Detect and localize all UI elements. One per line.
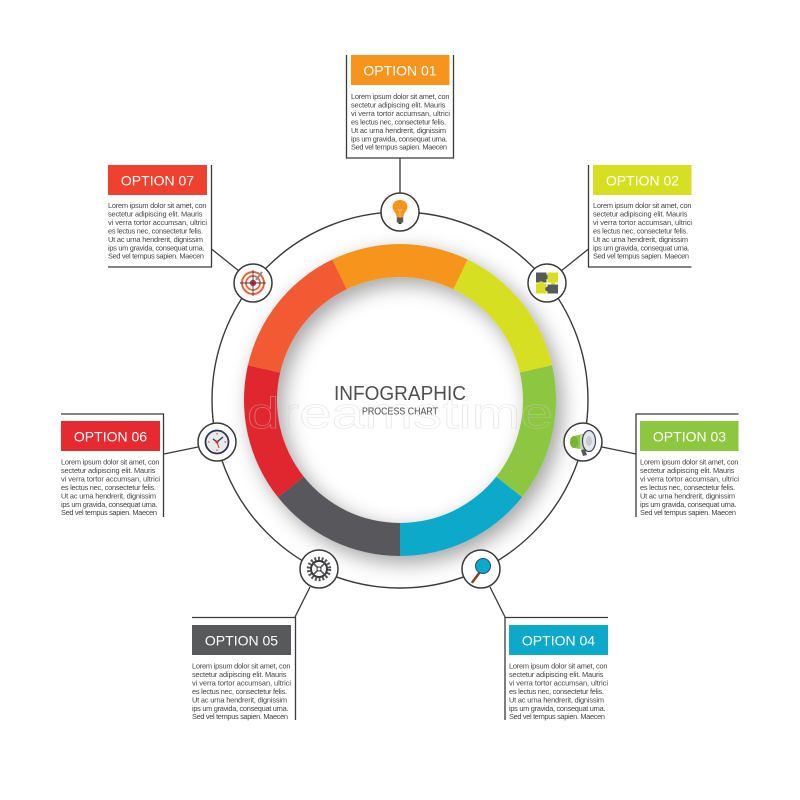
label [640,421,738,451]
segment: option 04 cyan [400,477,522,556]
text block: vi verra tortor accumsan, ultrici [509,678,608,687]
text block [593,201,692,261]
text block: ips um gravida, consequat urna. [593,243,690,252]
watermark: dreamstime [247,389,553,438]
icon: megaphone [564,423,602,461]
text block: Ut ac urna hendrerit, dignissim [61,491,156,500]
icon: gear [300,550,338,588]
text block: Sed vel tempus sapien. Maecen [593,252,689,261]
text block: Ut ac urna hendrerit, dignissim [351,126,446,135]
frame [505,618,608,720]
icon: light bulb [381,193,419,231]
label [192,625,291,655]
text block: ips um gravida, consequat urna. [61,500,158,509]
text block: es lectus nec, consectetur felis. [192,687,287,696]
connector [295,587,310,617]
text block: Ut ac urna hendrerit, dignissim [108,235,203,244]
heading: OPTION 04 [522,632,595,648]
text block: Sed vel tempus sapien. Maecen [108,252,204,261]
heading: OPTION 05 [205,632,278,648]
connector [212,249,239,271]
icon: clock [198,423,236,461]
panel: option 04 [490,587,608,721]
text block: es lectus nec, consectetur felis. [593,226,688,235]
text block: sectetur adipiscing elit. Mauris [192,670,287,679]
heading: OPTION 06 [74,428,147,444]
text block: es lectus nec, consectetur felis. [351,117,446,126]
text block: sectetur adipiscing elit. Mauris [61,466,156,475]
text block: ips um gravida, consequat urna. [640,500,736,509]
label [509,625,608,655]
heading: OPTION 02 [606,172,679,188]
text block: Lorem ipsum dolor sit amet, con [192,662,290,670]
text block: es lectus nec, consectetur felis. [108,226,203,235]
text block: es lectus nec, consectetur felis. [61,483,156,492]
label [108,165,207,195]
connector [164,447,198,454]
panel: option 02 [561,165,692,271]
text block: Lorem ipsum dolor sit amet, con [640,458,738,466]
heading: OPTION 03 [653,428,726,444]
text block [108,201,207,261]
text block [640,458,739,517]
segment: option 01 orange [332,244,468,289]
donut chart [244,244,556,556]
text block: sectetur adipiscing elit. Mauris [351,100,446,109]
segment: option 03 green [496,365,556,497]
text block: vi verra tortor accumsan, ultrici [593,218,692,227]
text block: es lectus nec, consectetur felis. [509,687,604,696]
text block: Sed vel tempus sapien. Maecen [61,508,157,517]
text block: ips um gravida, consequat urna. [509,704,606,713]
text block: ips um gravida, consequat urna. [351,134,448,143]
text block: vi verra tortor accumsan, ultrici [192,678,291,687]
subtitle: PROCESS CHART [362,406,438,418]
title: INFOGRAPHIC [334,382,466,405]
outer thin ring [212,212,588,588]
text block: Lorem ipsum dolor sit amet, con [61,458,160,466]
panel: option 03 [602,414,739,517]
frame [588,165,692,267]
connector [602,447,636,454]
text block [351,92,450,152]
text block: ips um gravida, consequat urna. [192,704,288,713]
text block: vi verra tortor accumsan, ultrici [108,218,207,227]
panel: option 05 [192,587,310,721]
frame [346,55,454,158]
text block: sectetur adipiscing elit. Mauris [509,670,604,679]
text block: vi verra tortor accumsan, ultrici [640,474,739,483]
segment: option 06 red [244,365,304,497]
icon: puzzle [528,264,566,302]
text block: vi verra tortor accumsan, ultrici [351,109,450,118]
text block: Lorem ipsum dolor sit amet, con [108,201,206,210]
text block [61,458,160,517]
text block: Ut ac urna hendrerit, dignissim [509,695,604,704]
segment: option 07 red-orange [248,260,347,373]
heading: OPTION 01 [363,62,437,78]
text block: Sed vel tempus sapien. Maecen [192,712,288,721]
text block: Sed vel tempus sapien. Maecen [640,508,736,517]
text block: sectetur adipiscing elit. Mauris [593,209,688,218]
frame [192,618,296,720]
text block: vi verra tortor accumsan, ultrici [61,474,160,483]
panel: option 06 [61,414,198,517]
frame [636,414,738,517]
text block: Ut ac urna hendrerit, dignissim [593,235,688,244]
segment: option 02 lime [453,260,552,373]
text block [192,662,291,721]
label [351,55,450,85]
text block: Lorem ipsum dolor sit amet, con [351,92,450,101]
connector [561,249,588,271]
label [593,165,692,195]
frame [108,165,212,267]
connector [399,158,401,193]
panel: option 07 [108,165,239,271]
connector [490,587,505,617]
text block: Lorem ipsum dolor sit amet, con [509,662,608,670]
panel: option 01 [346,55,454,193]
text block: Sed vel tempus sapien. Maecen [351,143,447,152]
icon: target [234,264,272,302]
text block: Ut ac urna hendrerit, dignissim [640,491,735,500]
text block: Sed vel tempus sapien. Maecen [509,712,605,721]
heading: OPTION 07 [121,172,194,188]
text block: Lorem ipsum dolor sit amet, con [593,201,692,210]
text block: Ut ac urna hendrerit, dignissim [192,695,287,704]
text block: es lectus nec, consectetur felis. [640,483,735,492]
segment: option 05 gray [278,477,400,556]
text block [509,662,608,721]
text block: sectetur adipiscing elit. Mauris [640,466,735,475]
label [61,421,160,451]
text block: sectetur adipiscing elit. Mauris [108,209,203,218]
frame [61,414,164,517]
icon: magnifier [462,550,500,588]
text block: ips um gravida, consequat urna. [108,243,204,252]
